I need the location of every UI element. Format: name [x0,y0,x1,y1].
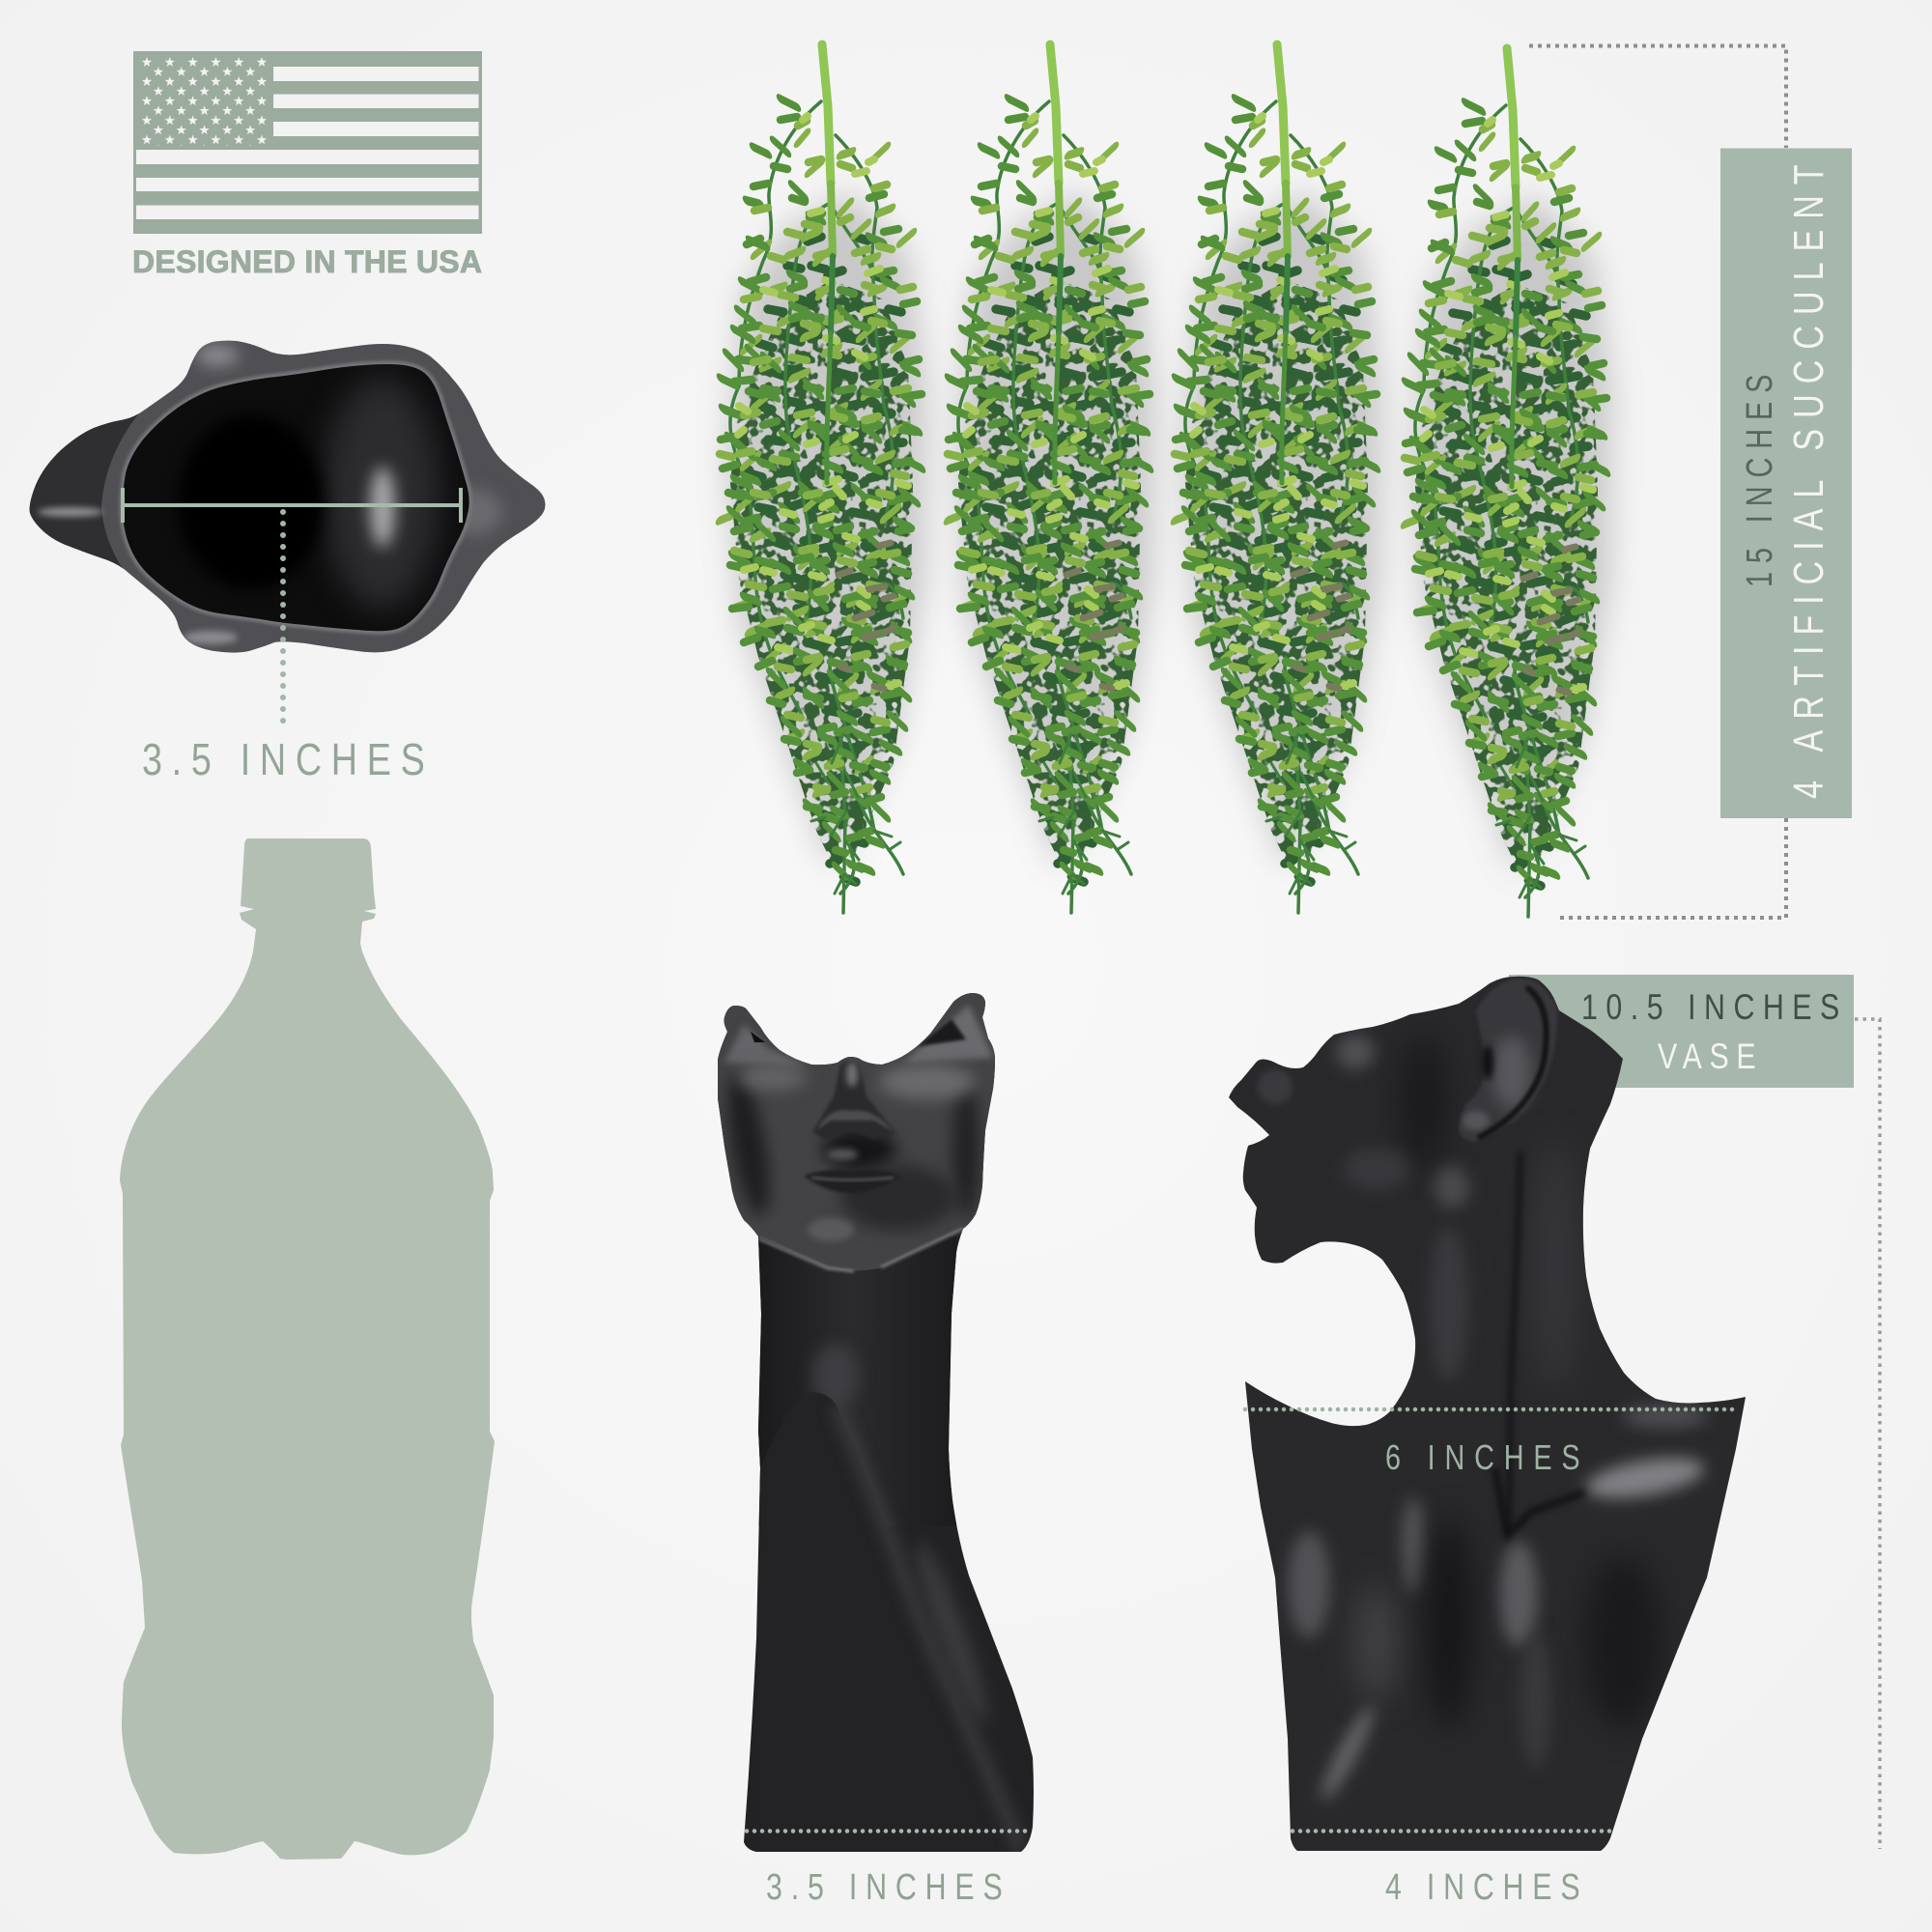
dotted bracket: vase height [1855,1019,1880,1849]
usa flag emblem [133,51,482,234]
label: 3.5 inches top view: 3.5 INCHES [142,734,425,784]
bottle silhouette [120,838,495,1860]
label: 4 artificial succulent: 4 ARTIFICIAL SUCCULENT [1785,164,1833,799]
plant 2 [948,44,1155,927]
text: designed in the usa: DESIGNED IN THE USA [132,244,482,279]
dotted leader: top view [280,512,286,723]
label: vase: VASE [1658,1037,1756,1077]
vase front view [718,993,1034,1852]
triangular panel [759,1392,838,1526]
label panel: vase height [1509,975,1854,1088]
plant 4 [1405,48,1612,931]
label: 15 inches: 15 INCHES [1739,375,1780,587]
chest highlights [1583,1451,1707,1505]
label: 10.5 inches: 10.5 INCHES [1581,987,1839,1028]
dotted bracket: plant height [1529,46,1786,918]
label panel: succulents [1720,149,1852,818]
vase side view [1227,966,1758,1864]
plant 3 [1175,44,1382,927]
dotted line: vase side base width [1293,1829,1613,1833]
plant 1 [720,44,927,927]
dimension line with end caps [123,488,461,523]
vase top view [29,340,545,653]
ear [1459,979,1557,1142]
label: 6 inches: 6 INCHES [1385,1437,1580,1477]
label: 3.5 inches base: 3.5 INCHES [766,1867,1003,1908]
nose and lips [812,1061,895,1140]
label: 4 inches base: 4 INCHES [1385,1867,1580,1908]
face mask [705,985,1005,1271]
neck tendon [1509,1152,1520,1526]
dotted line: vase front base width [747,1829,1029,1833]
dotted line: vase shoulder width [1245,1407,1734,1411]
